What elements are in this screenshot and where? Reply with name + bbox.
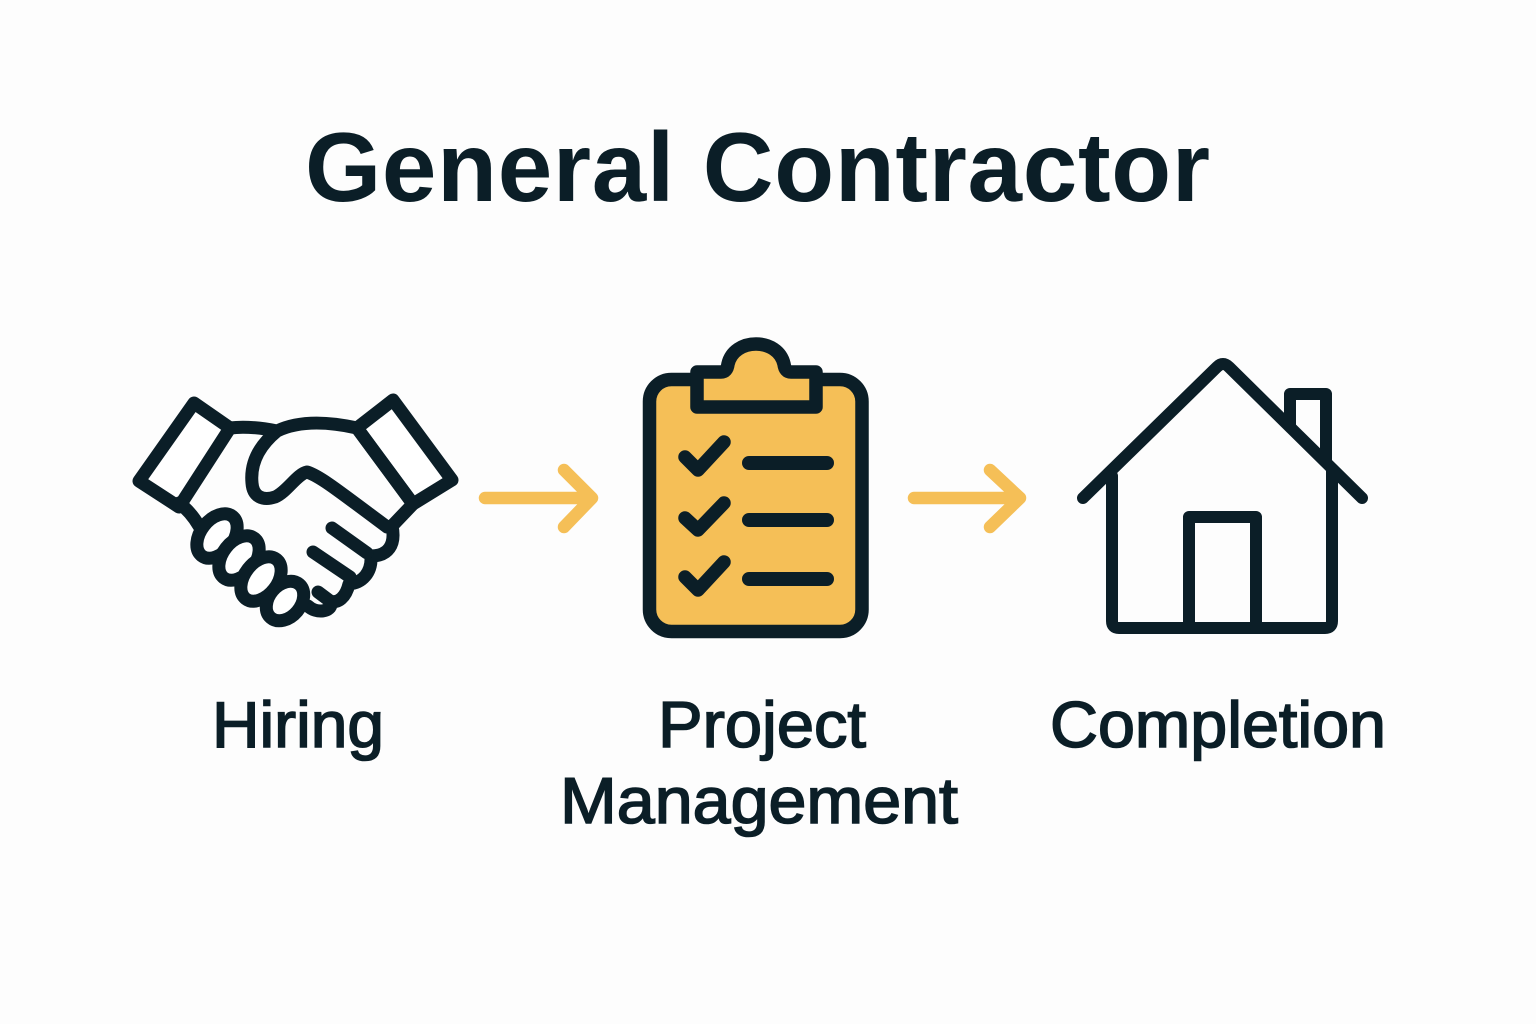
right-hand finger lines — [313, 528, 367, 577]
chimney — [1290, 394, 1326, 462]
icon: clipboard checklist — [650, 344, 862, 632]
left-hand fingers — [189, 506, 311, 628]
left cuff — [139, 403, 230, 507]
arrow: hiring to project management — [485, 470, 592, 527]
clipboard board — [650, 380, 862, 632]
label: Hiring: Hiring — [212, 688, 384, 761]
icon: house — [1083, 364, 1362, 628]
clipboard clip — [697, 344, 816, 407]
label: Completion: Completion — [1050, 688, 1386, 761]
roof — [1083, 364, 1362, 498]
checklist lines — [749, 463, 827, 579]
door — [1189, 517, 1256, 628]
label: Project Management: Project — [658, 688, 866, 761]
walls — [1112, 470, 1332, 628]
label: Project Management — [560, 688, 958, 837]
icon: handshake — [139, 400, 452, 628]
hands outline — [179, 423, 413, 611]
title: General Contractor — [305, 112, 1210, 222]
arrow: project management to completion — [914, 470, 1020, 527]
right cuff — [357, 400, 452, 504]
checklist marks — [685, 442, 724, 590]
label: Project Management: Management — [560, 764, 958, 837]
